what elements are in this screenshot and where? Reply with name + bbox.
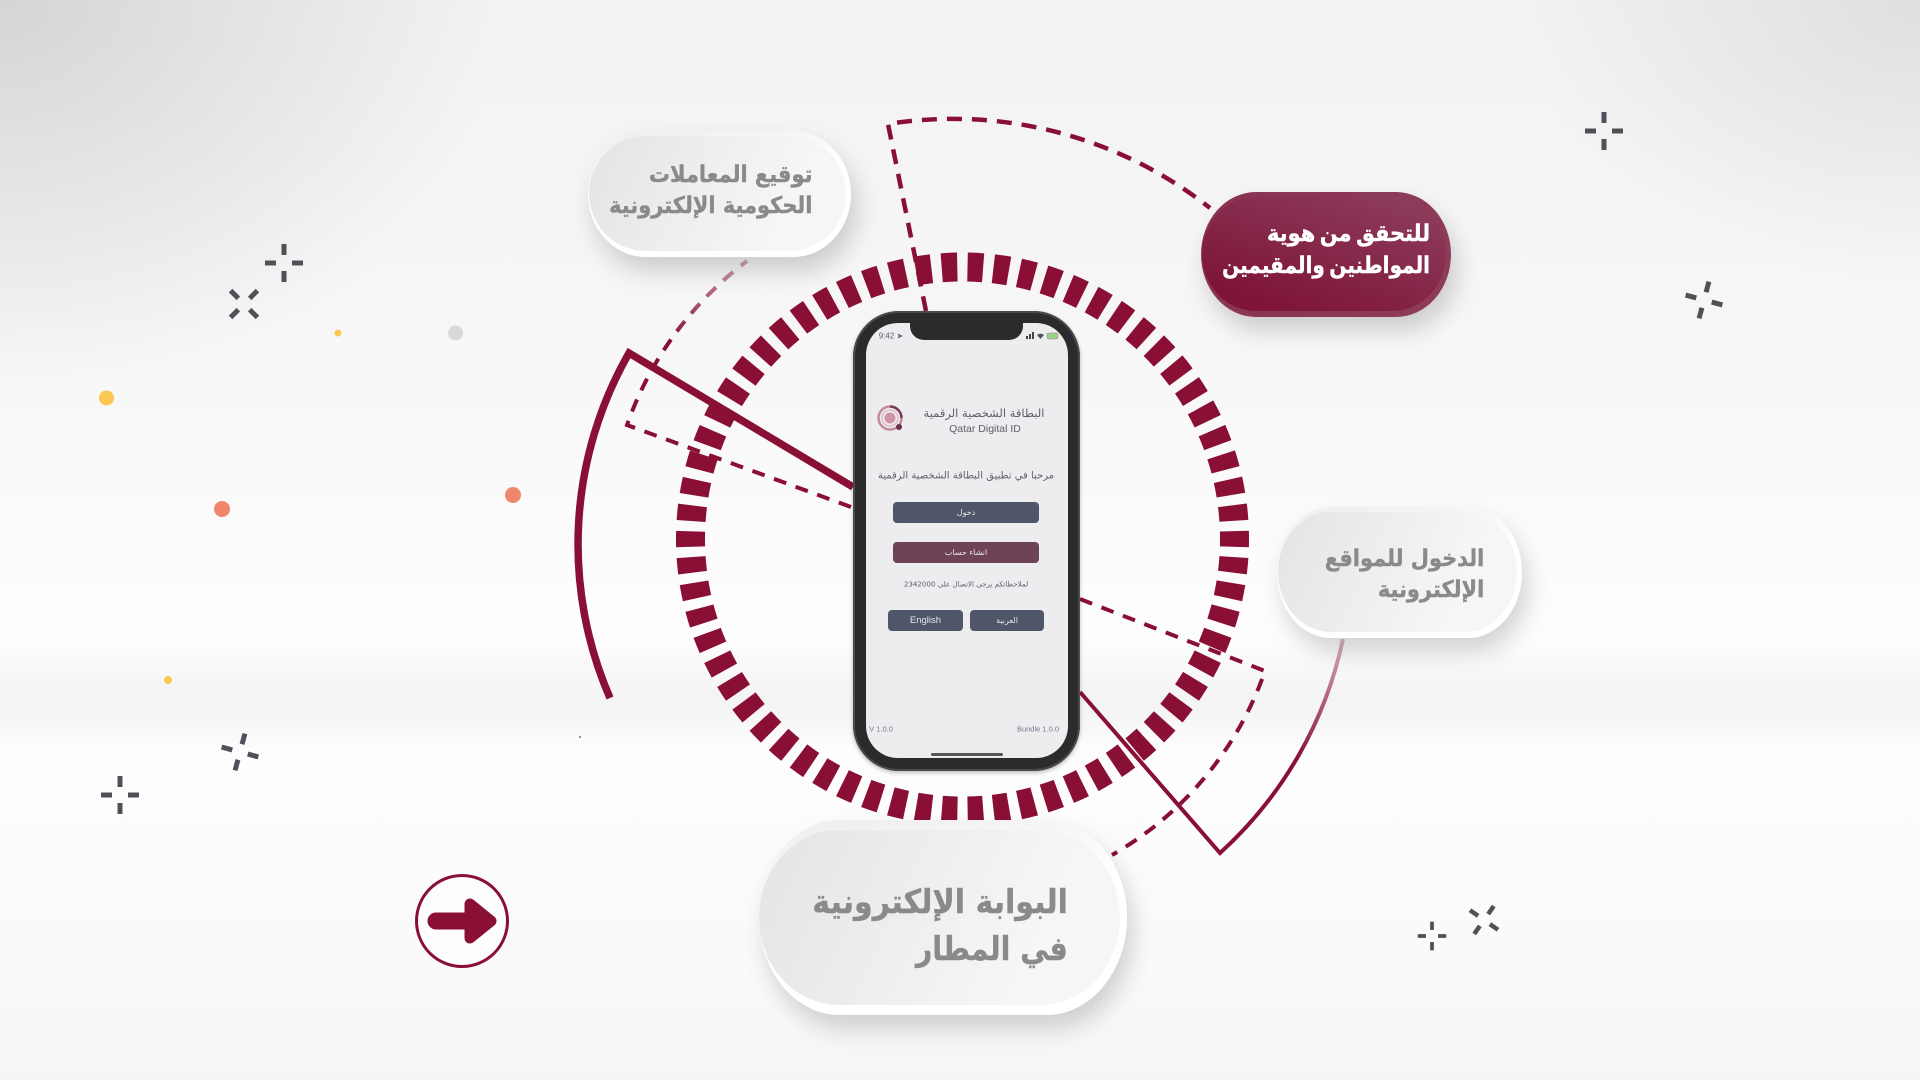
callout text: الدخول للمواقع — [1324, 546, 1484, 572]
callout text — [609, 162, 812, 219]
dotted ring — [690, 267, 1234, 811]
version label: V 1.0.0 — [869, 724, 893, 734]
solid sector: left — [578, 353, 853, 698]
dots — [99, 326, 581, 738]
arabic button — [970, 610, 1044, 631]
phone screen — [866, 323, 1068, 758]
callout: sign government transactions — [588, 131, 851, 257]
english button — [888, 610, 963, 631]
callout text: الحكومية الإلكترونية — [609, 193, 812, 219]
callout: access websites — [1277, 507, 1522, 638]
app logo — [877, 405, 903, 431]
register button: انشاء حساب — [945, 548, 987, 557]
dashed sector: left — [627, 261, 851, 507]
callout text: توقيع المعاملات — [649, 162, 812, 188]
notch — [910, 321, 1023, 340]
solid sector: right — [1080, 639, 1343, 853]
callout: airport e-gate — [759, 820, 1127, 1015]
home indicator — [931, 753, 1003, 756]
contact note: لملاحظاتكم يرجى الاتصال على 2342000 — [904, 580, 1028, 588]
welcome message: مرحبا في تطبيق البطاقة الشخصية الرقمية — [878, 470, 1054, 482]
decorative crosses — [101, 112, 1727, 950]
icon: arrow in circle — [416, 876, 508, 966]
login button: دخول — [957, 508, 975, 517]
callout text: الإلكترونية — [1378, 577, 1484, 603]
callout text: للتحقق من هوية — [1267, 221, 1430, 247]
arabic button: العربية — [996, 616, 1018, 625]
callout text — [812, 882, 1068, 968]
dashed sector: right — [1080, 599, 1265, 855]
callout: verify identity — [1201, 192, 1451, 317]
callout text — [1222, 221, 1430, 279]
callout text: في المطار — [916, 929, 1068, 968]
app title arabic: البطاقة الشخصية الرقمية — [924, 406, 1044, 420]
dashed sector: top — [888, 119, 1210, 311]
callout text: البوابة الإلكترونية — [812, 882, 1068, 921]
callout text — [1324, 546, 1484, 603]
phone mockup — [853, 311, 1080, 771]
english button: English — [910, 615, 941, 626]
status bar time: 9:42 ➤ — [879, 332, 903, 340]
login button — [893, 502, 1039, 523]
status bar icons — [1026, 332, 1058, 340]
callout text: المواطنين والمقيمين — [1222, 253, 1430, 279]
bundle label: Bundle 1.0.0 — [1017, 724, 1059, 734]
register button — [893, 542, 1039, 563]
app title english: Qatar Digital ID — [949, 423, 1021, 435]
